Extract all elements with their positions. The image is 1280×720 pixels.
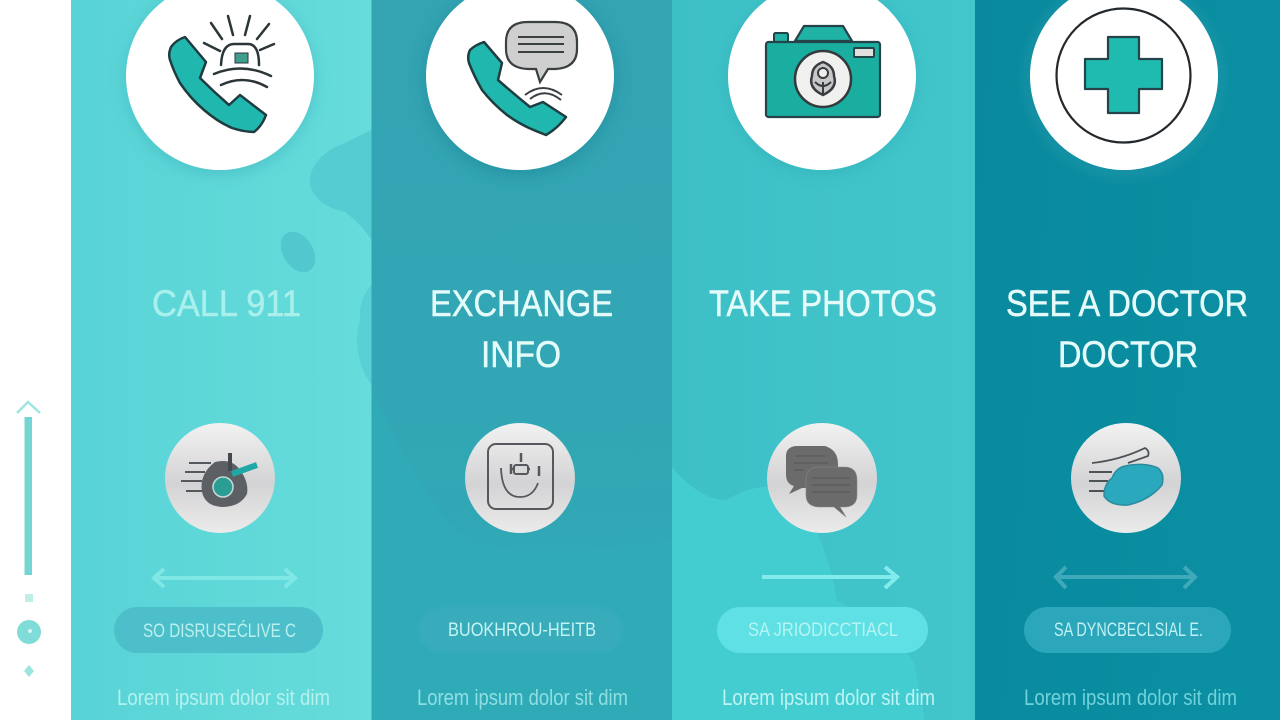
small icon: chat bubbles bbox=[767, 423, 877, 533]
pill label bbox=[717, 607, 928, 653]
heading: take photos: TAKE PHOTOS bbox=[709, 283, 937, 324]
background map blobs bbox=[672, 467, 925, 720]
body text: Lorem ipsum dolor sit dim bbox=[117, 685, 330, 710]
small icon: hand with blob bbox=[1071, 423, 1181, 533]
pill label bbox=[418, 607, 623, 653]
pill label: BUOKHROU-HEITB bbox=[448, 620, 596, 641]
faint arrow bbox=[457, 575, 582, 579]
top icon: camera bbox=[726, 0, 918, 175]
pill label bbox=[114, 607, 323, 653]
pill label: SA JRIODICCTIACL bbox=[748, 620, 898, 641]
panel: see a doctor bbox=[975, 0, 1280, 720]
heading: see a doctor bbox=[1006, 283, 1248, 375]
right arrow bbox=[762, 567, 897, 588]
panel: call 911 bbox=[71, 0, 372, 720]
panel 2 background bbox=[372, 0, 672, 720]
panel 1 background bbox=[71, 0, 372, 720]
panel: take photos bbox=[672, 0, 975, 720]
heading: see a doctor: SEE A DOCTOR bbox=[1006, 283, 1248, 324]
body text: Lorem ipsum dolor sit dim bbox=[1024, 685, 1237, 710]
top icon: medical cross bbox=[1022, 0, 1226, 180]
body text: Lorem ipsum dolor sit dim bbox=[722, 685, 935, 710]
heading: exchange info bbox=[430, 283, 613, 375]
background map blobs bbox=[274, 130, 372, 385]
panel: exchange info bbox=[372, 0, 672, 720]
double arrow bbox=[154, 569, 295, 587]
heading: call 911: CALL 911 bbox=[152, 283, 301, 324]
pill label bbox=[1024, 607, 1231, 653]
pill label: SA DYNCBECLSIAL E. bbox=[1054, 620, 1203, 641]
pill label: SO DISRUSEĆLIVE C bbox=[143, 620, 296, 642]
top icon: phone with siren bbox=[124, 0, 316, 176]
small icon: plug in frame bbox=[465, 423, 575, 533]
heading: see a doctor: DOCTOR bbox=[1058, 334, 1198, 375]
double arrow bbox=[1056, 567, 1195, 588]
heading: exchange info: INFO bbox=[481, 334, 561, 375]
panel 4 background bbox=[975, 0, 1280, 720]
sidebar progress indicator bbox=[17, 402, 41, 677]
small icon: gear with motion lines bbox=[165, 423, 275, 533]
body text: Lorem ipsum dolor sit dim bbox=[417, 685, 628, 710]
background map blobs bbox=[372, 390, 672, 720]
top icon: phone with speech bubble bbox=[423, 0, 617, 177]
panel 3 background bbox=[672, 0, 975, 720]
heading: exchange info: EXCHANGE bbox=[430, 283, 613, 324]
